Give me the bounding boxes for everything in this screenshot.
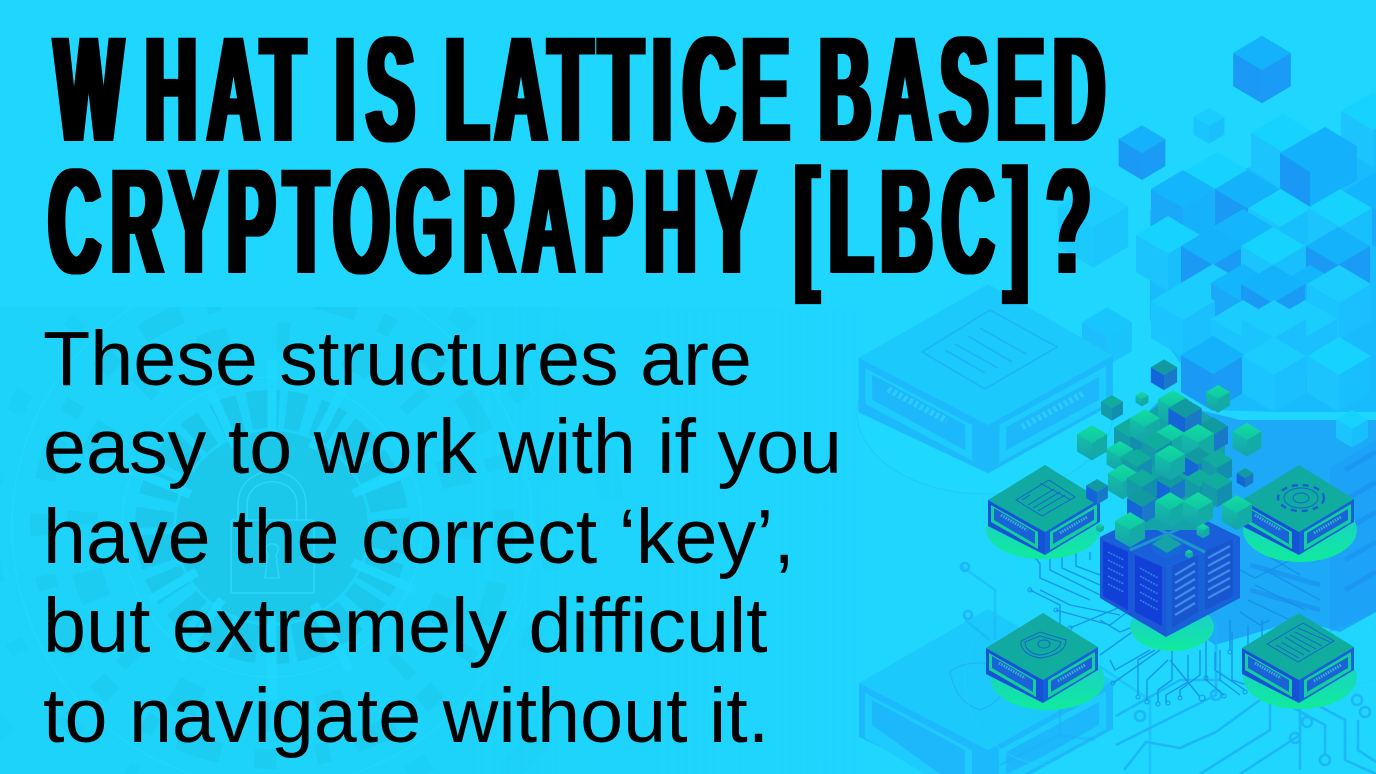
pale server tower <box>1250 440 1376 632</box>
body text: have the correct ‘key’, <box>43 494 795 580</box>
pale server pod upper <box>857 284 1113 494</box>
body text: to navigate without it. <box>43 673 769 759</box>
title line 1: WHAT IS LATTICE BASED <box>55 5 1105 173</box>
pale large circuit traces <box>960 563 1376 774</box>
circuit traces <box>1028 545 1320 706</box>
server pod: gear <box>1242 465 1354 555</box>
floating data cubes <box>1077 359 1261 558</box>
pale cube mass <box>1150 150 1376 412</box>
pale right platform <box>1140 400 1376 645</box>
data cube cluster <box>1107 390 1252 547</box>
lock icon <box>231 471 314 593</box>
pale server pod lower <box>859 609 1113 774</box>
server pod: shield <box>986 613 1098 703</box>
body text <box>43 316 842 759</box>
body text: easy to work with if you <box>43 404 842 490</box>
title <box>48 5 1105 305</box>
server pod: document <box>988 465 1100 555</box>
body text: These structures are <box>43 316 752 402</box>
pale circle arcs <box>965 595 1376 765</box>
illustration: pale background cubes and platforms <box>857 36 1376 774</box>
pale cube cluster <box>1136 92 1376 448</box>
background lock emblem <box>0 307 561 774</box>
server pod: bar chart <box>1242 613 1354 703</box>
body text: but extremely difficult <box>43 583 768 669</box>
green platform ellipses <box>986 498 1357 710</box>
floating pale cubes <box>1058 36 1291 366</box>
central server rack <box>1100 503 1240 637</box>
title line 2: CRYPTOGRAPHY [LBC]? <box>48 137 1090 305</box>
